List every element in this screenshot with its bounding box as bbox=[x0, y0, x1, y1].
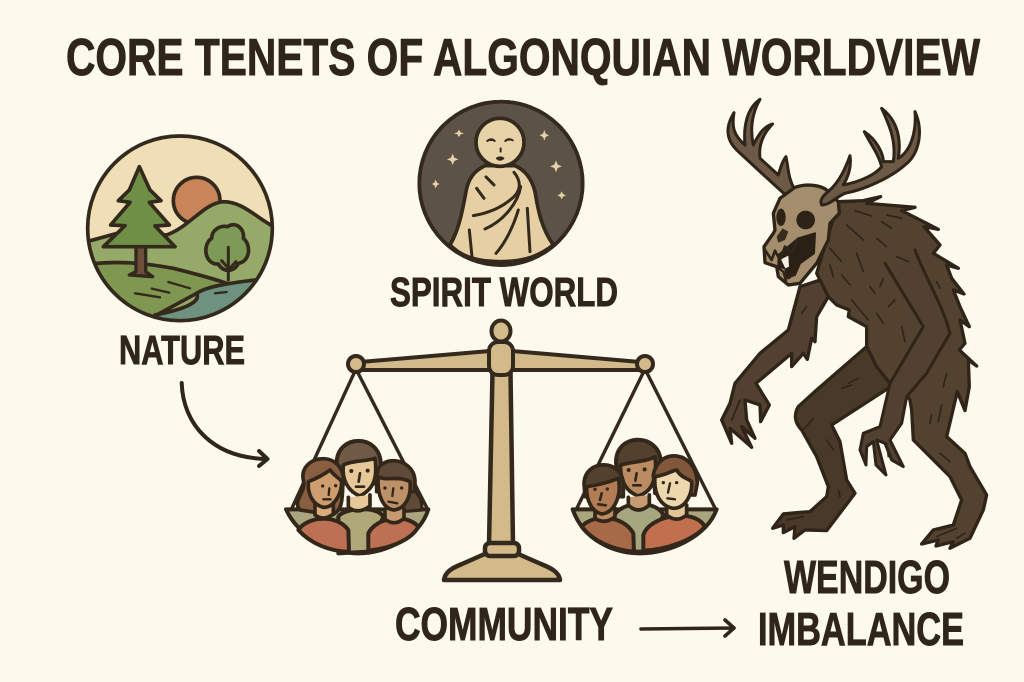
person: left man bbox=[582, 518, 634, 552]
arrow: community to wendigo bbox=[641, 620, 734, 636]
person: right man bbox=[643, 516, 705, 551]
left pan with people bbox=[286, 441, 428, 553]
scale column and base bbox=[489, 372, 513, 545]
wendigo torso and right leg bbox=[817, 197, 987, 548]
scale chains bbox=[292, 369, 716, 510]
label: nature: NATURE bbox=[119, 327, 245, 373]
wendigo skull bbox=[764, 185, 839, 285]
wendigo antlers bbox=[728, 99, 794, 196]
balance scale bbox=[292, 320, 716, 580]
scale beam bbox=[360, 351, 640, 370]
wendigo eye sockets and nose bbox=[796, 211, 815, 229]
wendigo left arm bbox=[722, 277, 830, 447]
label: spirit world: SPIRIT WORLD bbox=[390, 269, 618, 315]
person: center bbox=[613, 504, 663, 552]
icon: spirit world circle bbox=[419, 102, 583, 265]
stars bbox=[432, 130, 566, 199]
right pan with people bbox=[573, 440, 717, 553]
label: wendigo: WENDIGO bbox=[784, 551, 950, 603]
icon: nature circle bbox=[87, 136, 277, 330]
person: left woman bbox=[297, 459, 343, 515]
wendigo fur marks bbox=[732, 211, 965, 538]
person: center bbox=[338, 509, 383, 553]
wendigo right arm bbox=[860, 250, 950, 475]
label: community: COMMUNITY bbox=[395, 598, 613, 650]
person: right woman bbox=[368, 518, 418, 551]
wendigo mouth and teeth bbox=[778, 233, 815, 278]
wendigo creature bbox=[722, 99, 987, 548]
arrow: nature to community bbox=[182, 383, 268, 466]
wendigo left leg bbox=[773, 347, 907, 538]
